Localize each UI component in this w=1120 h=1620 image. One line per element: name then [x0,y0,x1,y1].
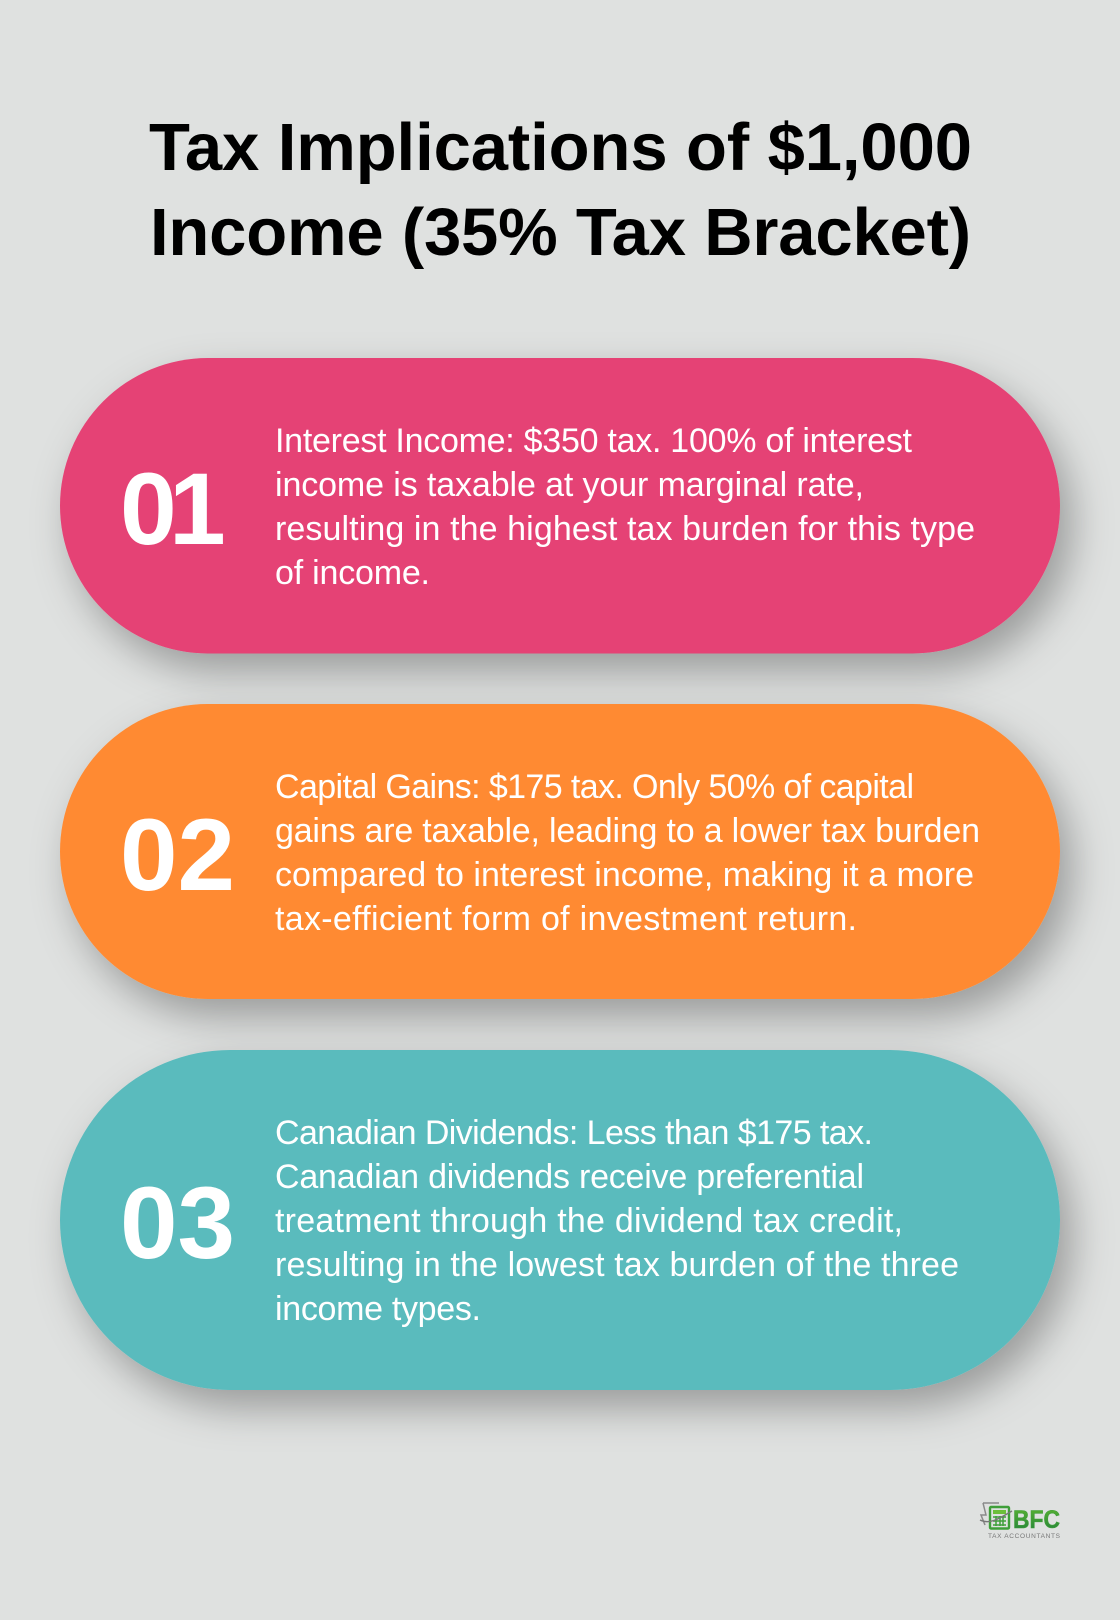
panel: interest income [60,358,1060,654]
panel: capital gains [60,704,1060,999]
number 02: 02 [120,798,235,912]
text: interest income: income is taxable at your marginal rate, [275,466,864,504]
number 01: 01 [120,452,226,566]
text: interest income: Interest Income: $350 tax. 100% of interest [275,422,913,460]
text: capital gains: gains are taxable, leading to a lower tax burden [275,812,980,850]
panel: canadian dividends [60,1050,1060,1390]
text: canadian dividends: Canadian Dividends: Less than $175 tax. [275,1114,873,1152]
text: capital gains [275,768,980,938]
title: Income (35% Tax Bracket) [150,195,971,270]
logo wordmark: BFC [1013,1506,1060,1534]
text: canadian dividends: treatment through the dividend tax credit, [275,1202,903,1240]
text: canadian dividends: income types. [275,1290,481,1328]
logo tagline: TAX ACCOUNTANTS [988,1533,1061,1540]
logo: BFC Tax Accountants [980,1503,1061,1540]
text: canadian dividends [275,1114,959,1328]
number 03: 03 [120,1166,235,1280]
text: interest income [275,422,975,592]
icon: calculator [980,1503,1012,1528]
title [149,110,972,270]
text: interest income: of income. [275,554,430,592]
title: Tax Implications of $1,000 [149,110,972,185]
text: canadian dividends: resulting in the lowest tax burden of the three [275,1246,959,1284]
text: capital gains: tax-efficient form of investment return. [275,900,857,938]
text: canadian dividends: Canadian dividends receive preferential [275,1158,864,1196]
text: capital gains: compared to interest income, making it a more [275,856,974,894]
text: capital gains: Capital Gains: $175 tax. Only 50% of capital [275,768,914,806]
text: interest income: resulting in the highest tax burden for this type [275,510,975,548]
